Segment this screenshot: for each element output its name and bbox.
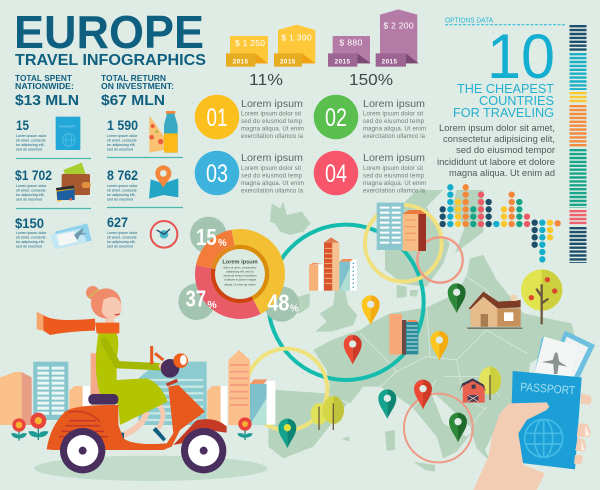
stat: 627: 627 bbox=[107, 214, 128, 230]
donut centre text: eiusmod tempor incididunt bbox=[223, 273, 257, 277]
numbered item 01: Lorem ipsum bbox=[241, 98, 303, 110]
numbered item 03: exercitation ullamco la bbox=[241, 188, 304, 194]
150 percent: 150% bbox=[349, 72, 393, 89]
stat: $1 702: tur adipiscing elit, bbox=[16, 193, 44, 197]
numbered item 04: Lorem ipsum bbox=[363, 152, 425, 164]
tag: $ 880: $ 880 bbox=[339, 38, 363, 48]
numbered item 04: magna aliqua. Ut enim bbox=[363, 181, 426, 187]
stat: $150: sit amet, consecte bbox=[16, 236, 46, 240]
stat: $1 702 bbox=[15, 167, 52, 202]
stat: $150: Lorem ipsum dolor bbox=[16, 231, 47, 235]
icons beside stats bbox=[50, 111, 178, 249]
dot matrix chart bbox=[443, 187, 558, 260]
buildings in central Europe bbox=[389, 314, 418, 355]
stat: $1 702: $1 702 bbox=[15, 167, 52, 183]
tag: $ 1 390 bbox=[274, 25, 315, 67]
donut centre text: aliqua. Ut enim ad minim bbox=[224, 283, 256, 287]
numbered item 03: magna aliqua. Ut enim bbox=[241, 181, 304, 187]
stat: 1 590: sed do eiusmod bbox=[107, 148, 133, 152]
title: TRAVEL INFOGRAPHICS bbox=[15, 52, 206, 69]
stat: 8 762: tur adipiscing elit, bbox=[107, 193, 136, 197]
11 percent: 11% bbox=[249, 72, 283, 89]
options data panel: Lorem ipsum dolor sit amet, bbox=[439, 123, 555, 133]
house bbox=[467, 292, 522, 329]
numbered item 02: 02 bbox=[325, 104, 347, 132]
stat: $1 702: Lorem ipsum dolor bbox=[16, 184, 47, 188]
stat: 627: sit amet, consecte bbox=[107, 236, 137, 240]
icon: plane tickets bbox=[50, 223, 92, 249]
icon: pizza and bottle bbox=[149, 111, 178, 153]
total return: $67 MLN bbox=[101, 92, 165, 109]
stat: 8 762 bbox=[107, 167, 138, 202]
donut percent labels: 15 bbox=[196, 224, 217, 250]
tag: $ 1 390: $ 1 390 bbox=[281, 33, 312, 43]
donut percent labels: 48 bbox=[267, 290, 289, 316]
stat: 15: Lorem ipsum dolor bbox=[16, 134, 47, 138]
donut centre text: dolor sit amet, consectetur bbox=[223, 266, 257, 270]
total spent: $13 MLN bbox=[15, 92, 79, 109]
stat: 627: Lorem ipsum dolor bbox=[107, 231, 138, 235]
donut chart bbox=[178, 217, 299, 322]
numbered item 02: exercitation ullamco la bbox=[363, 134, 426, 140]
stat: 627: tur adipiscing elit, bbox=[107, 240, 136, 244]
total return: TOTAL RETURN bbox=[101, 73, 166, 83]
donut percent labels bbox=[186, 224, 299, 316]
passport bbox=[510, 371, 582, 469]
city skyline bbox=[0, 350, 275, 425]
stat: 1 590: tur adipiscing elit, bbox=[107, 143, 136, 147]
stat: 8 762: Lorem ipsum dolor bbox=[107, 184, 138, 188]
scooter scene bbox=[0, 286, 275, 481]
stat: 627 bbox=[107, 214, 138, 248]
options data panel bbox=[437, 18, 565, 178]
tag: $ 2 200: $ 2 200 bbox=[383, 21, 414, 31]
title: EUROPE bbox=[14, 6, 204, 58]
stat: $1 702: sed do eiusmod bbox=[16, 198, 42, 202]
numbered item 01: 01 bbox=[206, 104, 228, 132]
numbered item 01: Lorem ipsum dolor sit bbox=[241, 112, 301, 118]
numbered item 02: Lorem ipsum dolor sit bbox=[363, 112, 423, 118]
donut centre text bbox=[222, 259, 258, 287]
options data panel: 10 bbox=[487, 22, 555, 92]
map decorations: buildings, house, trees, barn bbox=[278, 203, 562, 448]
legs bbox=[123, 412, 147, 435]
options data panel: magna aliqua. Ut enim ad bbox=[449, 168, 555, 178]
stat: $150: sed do eiusmod bbox=[16, 244, 42, 248]
scarf bbox=[37, 312, 43, 331]
total return bbox=[101, 73, 174, 109]
numbered item 02: Lorem ipsum bbox=[363, 98, 425, 110]
numbered item 02: magna aliqua. Ut enim bbox=[363, 126, 426, 132]
scooter bbox=[47, 346, 227, 473]
map pins bbox=[278, 283, 467, 448]
donut percent labels: % bbox=[218, 238, 227, 249]
numbered item 04: exercitation ullamco la bbox=[363, 188, 426, 194]
donut centre text: Lorem ipsum bbox=[222, 259, 258, 265]
numbered item 04: 04 bbox=[325, 160, 347, 188]
small trees in Spain bbox=[311, 396, 344, 430]
options data panel: COUNTRIES bbox=[479, 93, 554, 108]
donut percent labels: % bbox=[207, 300, 217, 311]
woman rider bbox=[37, 286, 168, 448]
stat: $150 bbox=[15, 215, 47, 248]
numbered item 03 bbox=[195, 151, 304, 195]
total spent bbox=[15, 73, 79, 109]
tag: $ 880: 2015 bbox=[335, 58, 350, 65]
options data panel: incididunt ut labore et dolore bbox=[437, 157, 555, 167]
options data panel: THE CHEAPEST bbox=[457, 81, 554, 96]
icon: passport: PASSPORT bbox=[59, 124, 75, 128]
donut percent labels: 37 bbox=[186, 286, 206, 312]
head and hair bbox=[105, 313, 114, 325]
numbered item 03: Lorem ipsum bbox=[241, 152, 303, 164]
stat: 8 762: 8 762 bbox=[107, 167, 138, 183]
numbered item 04: Lorem ipsum dolor sit bbox=[363, 166, 423, 172]
icon: wallet bbox=[56, 163, 91, 202]
options data panel: OPTIONS DATA bbox=[445, 18, 493, 24]
stat: $150: tur adipiscing elit, bbox=[16, 240, 44, 244]
stat: $150: $150 bbox=[15, 215, 44, 231]
vertical stripe chart bbox=[570, 25, 586, 263]
stat: 15: 15 bbox=[16, 117, 29, 133]
numbered item 02: sed do eiusmod temp bbox=[363, 119, 425, 125]
numbered item 04 bbox=[314, 151, 426, 195]
icon: clock bbox=[151, 221, 177, 248]
donut centre text: ut labore et dolore magna bbox=[224, 278, 257, 282]
tag: $ 2 200: 2015 bbox=[382, 58, 397, 65]
donut percent labels: % bbox=[290, 303, 299, 314]
numbered item 01 bbox=[195, 95, 304, 140]
stat: 8 762: sed do eiusmod bbox=[107, 198, 133, 202]
options data panel: consectetur adipisicing elit, bbox=[443, 134, 555, 144]
tag: $ 1 390: 2015 bbox=[280, 58, 296, 65]
total spent: NATIONWIDE: bbox=[15, 81, 74, 91]
stat: 1 590: 1 590 bbox=[107, 117, 138, 133]
numbered item 03: Lorem ipsum dolor sit bbox=[241, 166, 301, 172]
price tags bbox=[226, 9, 419, 67]
apple tree bbox=[521, 269, 562, 324]
tag: $ 2 200 bbox=[376, 9, 419, 67]
stat: 15: sed do eiusmod bbox=[16, 148, 42, 152]
map of Europe bbox=[268, 190, 575, 472]
numbered item 03: 03 bbox=[206, 160, 228, 188]
numbered item 02 bbox=[314, 95, 426, 140]
tickets bbox=[535, 331, 595, 387]
stat: 1 590: Lorem ipsum dolor bbox=[107, 134, 138, 138]
numbered item 01: magna aliqua. Ut enim bbox=[241, 126, 304, 132]
stat: 1 590: sit amet, consecte bbox=[107, 138, 137, 142]
stat: $1 702: sit amet, consecte bbox=[16, 188, 46, 192]
stat: 627: sed do eiusmod bbox=[107, 244, 133, 248]
hand bbox=[473, 393, 592, 490]
ground shadow bbox=[34, 456, 267, 481]
stat: 15: tur adipiscing elit, bbox=[16, 143, 44, 147]
icon: map with pin bbox=[149, 165, 178, 199]
numbered item 01: sed do eiusmod temp bbox=[241, 119, 303, 125]
donut centre text: adipisicing elit, sed do bbox=[226, 269, 254, 273]
options data panel: FOR TRAVELING bbox=[453, 105, 554, 120]
barn and tree bbox=[459, 367, 501, 403]
stat: 15: sit amet, consecte bbox=[16, 138, 46, 142]
numbered item 01: exercitation ullamco la bbox=[241, 134, 304, 140]
tag: $ 1 250 bbox=[226, 36, 268, 67]
numbered item 03: sed do eiusmod temp bbox=[241, 174, 303, 180]
flowers bbox=[11, 413, 253, 441]
tag: $ 1 250: $ 1 250 bbox=[235, 38, 265, 48]
buildings near Britain bbox=[309, 237, 357, 291]
buildings near Scandinavia bbox=[377, 203, 426, 251]
options data panel: sed do eiusmod tempor bbox=[456, 145, 555, 155]
passport: PASSPORT bbox=[520, 381, 576, 397]
stat: 8 762: sit amet, consecte bbox=[107, 188, 137, 192]
dress bbox=[96, 331, 168, 425]
hand bbox=[159, 362, 166, 370]
hand holding passport and tickets bbox=[473, 331, 595, 490]
tag: $ 880 bbox=[328, 36, 371, 67]
numbered item 04: sed do eiusmod temp bbox=[363, 174, 425, 180]
total spent: TOTAL SPENT bbox=[15, 73, 73, 83]
tag: $ 1 250: 2015 bbox=[233, 58, 248, 65]
stat: 1 590 bbox=[107, 117, 138, 152]
circle overlays on the map bbox=[246, 205, 473, 462]
total return: ON INVESTMENT: bbox=[101, 81, 174, 91]
stat: 15 bbox=[16, 117, 47, 152]
